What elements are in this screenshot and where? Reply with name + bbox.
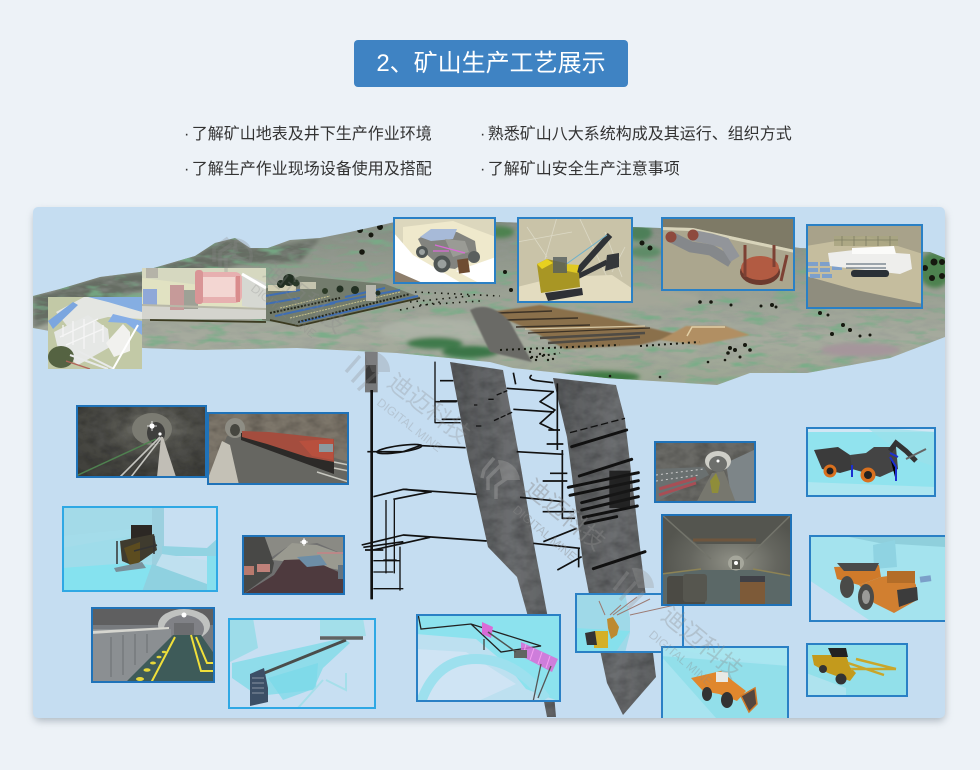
watermark: centre upper: 迪迈科技 (382, 368, 475, 449)
jumbo vehicle (812, 648, 896, 684)
watermark: lower right (614, 568, 747, 689)
scattered trees (357, 224, 945, 378)
mine model illustration (30, 207, 949, 725)
haul truck body (834, 563, 931, 613)
inset: underground room (242, 535, 345, 595)
bullet: eight systems: · 熟悉矿山八大系统构成及其运行、组织方式 (480, 126, 792, 143)
title: 2、矿山生产工艺展示 (376, 50, 606, 77)
inset: orange haul truck (809, 535, 945, 622)
inset: orange loader (661, 646, 789, 718)
inset: rail train (207, 412, 349, 485)
dark ridge left (33, 238, 320, 328)
inset: drill rig (806, 224, 923, 309)
watermark: centre: DIGITAL MINE (510, 503, 579, 564)
title (354, 40, 628, 87)
inset: belt conveyor (228, 618, 376, 709)
watermark: lower right: DIGITAL MINE (646, 628, 715, 689)
surface terrain (33, 220, 951, 390)
inset: electric shovel (517, 217, 633, 303)
shovel machine (537, 235, 619, 301)
bullet: safety: · 了解矿山安全生产注意事项 (480, 161, 680, 178)
watermark: top-left: 迪迈科技 (258, 258, 351, 339)
bullet: equipment: · 了解生产作业现场设备使用及搭配 (184, 161, 432, 178)
watermark: lower right: 迪迈科技 (656, 602, 747, 684)
terrain patches (380, 225, 951, 383)
watermark: centre upper: DIGITAL MINE (374, 395, 445, 455)
inset: main tunnel (76, 405, 207, 478)
tunnel network (362, 352, 645, 599)
panel: mine scene background (33, 207, 945, 721)
inset: miner at drill (575, 593, 684, 653)
open pit (490, 305, 750, 349)
underground shaft right (553, 378, 656, 715)
inset: bolting rig (806, 427, 936, 497)
loader body (691, 671, 757, 712)
inset: white processing plant (48, 297, 142, 369)
inset: refuge tunnel (654, 441, 756, 503)
inset: maintenance tunnel (661, 514, 792, 606)
dark slope (470, 307, 532, 362)
inset: rig in cyan chamber (62, 506, 218, 592)
inset: mining truck (393, 217, 496, 284)
inset: underground piping (416, 614, 561, 702)
bolter vehicle (814, 443, 926, 482)
watermark: centre: 迪迈科技 (519, 474, 610, 556)
watermark: top-left (214, 238, 351, 341)
terrain mottling (33, 220, 945, 390)
inset: pumps and disc (661, 217, 795, 291)
watermark: centre upper (346, 351, 475, 455)
watermark: top-left: DIGITAL MINE (248, 281, 319, 341)
inset: electrical room (91, 607, 215, 683)
watermark: centre (482, 458, 610, 564)
bullet: surface environment: · 了解矿山地表及井下生产作业环境 (184, 126, 432, 143)
mining town (150, 274, 420, 326)
rock drill rig machine (114, 525, 157, 572)
inset: ball mill (142, 268, 266, 319)
inset: yellow jumbo drill (806, 643, 908, 697)
bullet list (184, 125, 792, 178)
underground shaft left (450, 362, 556, 717)
